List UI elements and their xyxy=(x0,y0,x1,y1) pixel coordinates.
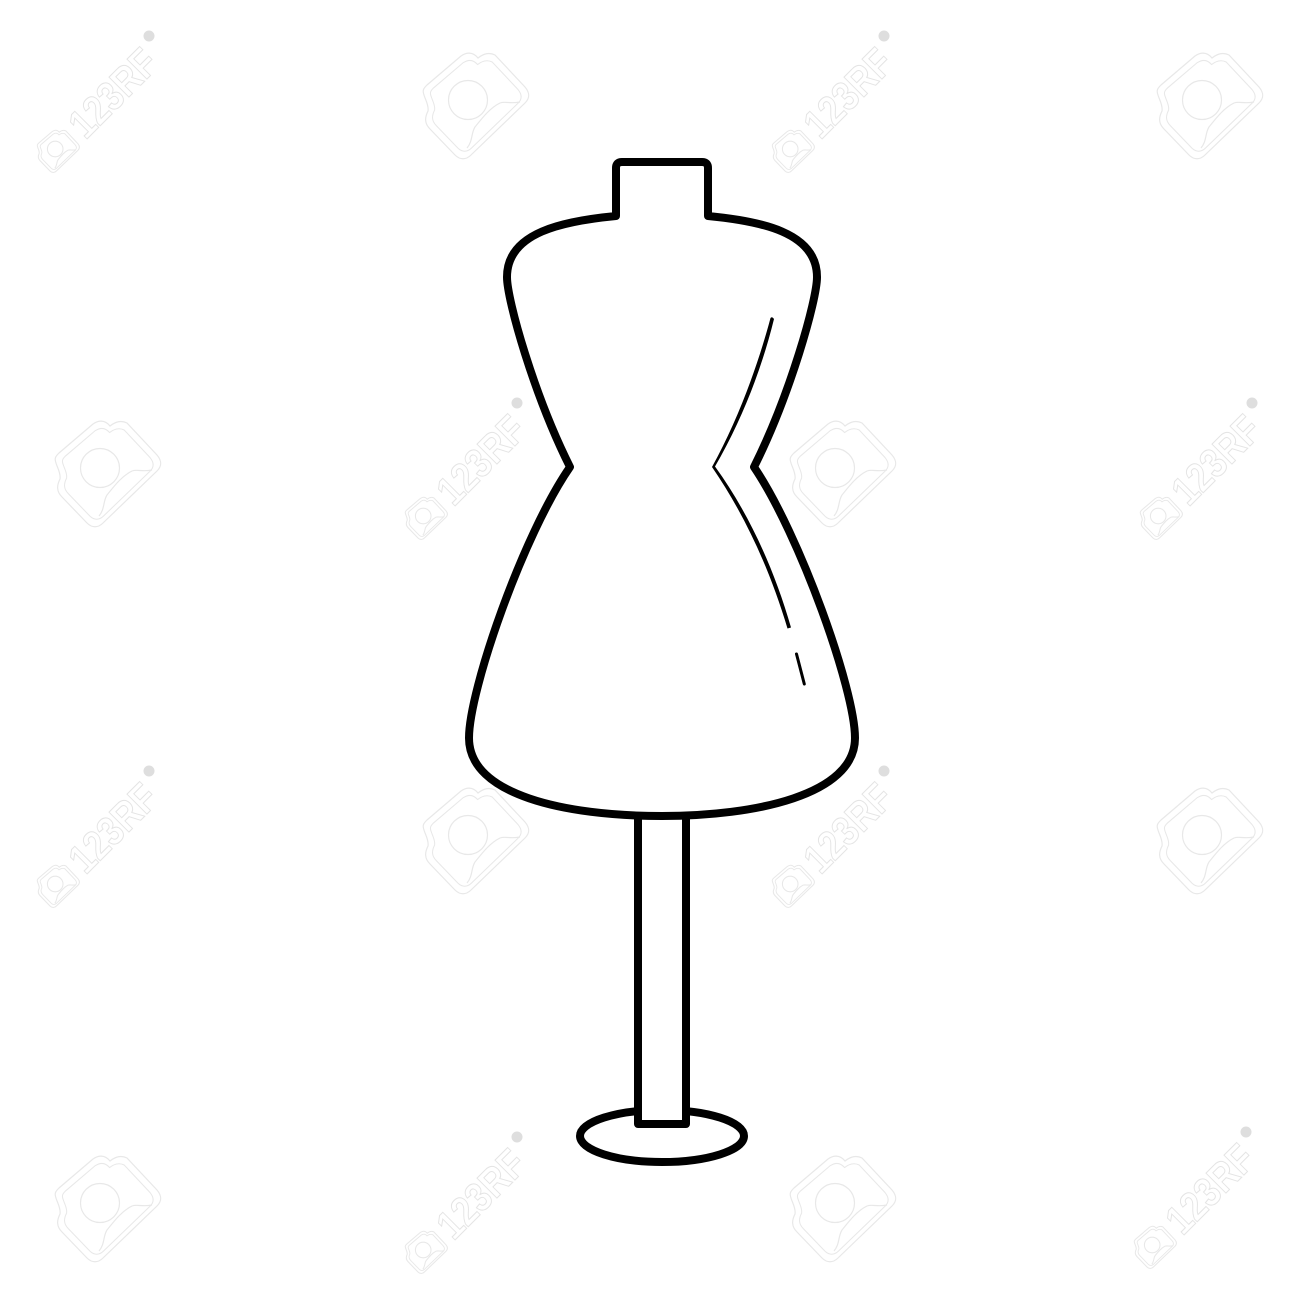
watermark: egg row 4 centre-right xyxy=(790,1156,896,1262)
watermark: logo row 3 left: 123RF xyxy=(59,774,167,882)
watermark: egg row 2 left xyxy=(55,421,161,527)
watermark: logo row 3 centre-right: 123RF xyxy=(794,774,902,882)
watermark: logo row 1 centre-right: 123RF xyxy=(794,39,902,147)
watermark: logo row 3 centre-right xyxy=(772,766,902,908)
watermark: logo row 4 right xyxy=(1134,1126,1264,1268)
torso highlight line xyxy=(712,317,791,628)
mannequin torso outline xyxy=(469,162,855,816)
watermark: egg row 1 right xyxy=(1157,53,1263,159)
watermark: egg row 4 left xyxy=(55,1156,161,1262)
torso highlight dash xyxy=(796,654,804,684)
watermark: logo row 4 centre xyxy=(405,1132,535,1274)
watermark: logo row 1 left: 123RF xyxy=(59,39,167,147)
watermark: logo row 2 right: 123RF xyxy=(1162,406,1270,514)
mannequin base plate xyxy=(580,1110,744,1162)
watermark: egg row 1 centre xyxy=(423,53,529,159)
watermark: logo row 3 left xyxy=(37,766,167,908)
watermark: logo row 4 right: 123RF xyxy=(1156,1135,1264,1243)
watermark: logo row 2 centre: 123RF xyxy=(427,406,535,514)
watermark: logo row 4 centre: 123RF xyxy=(427,1140,535,1248)
watermark: logo row 2 right xyxy=(1140,398,1270,540)
icon: dress form mannequin xyxy=(469,162,855,1162)
watermark: logo row 1 left xyxy=(37,30,167,172)
watermark: logo row 1 centre-right xyxy=(772,30,902,172)
watermark: logo row 2 centre xyxy=(405,398,535,540)
mannequin stand pole xyxy=(638,810,686,1124)
watermark: egg row 2 centre-right xyxy=(790,421,896,527)
watermark: egg row 3 centre xyxy=(423,788,529,894)
watermark: egg row 3 right xyxy=(1157,788,1263,894)
